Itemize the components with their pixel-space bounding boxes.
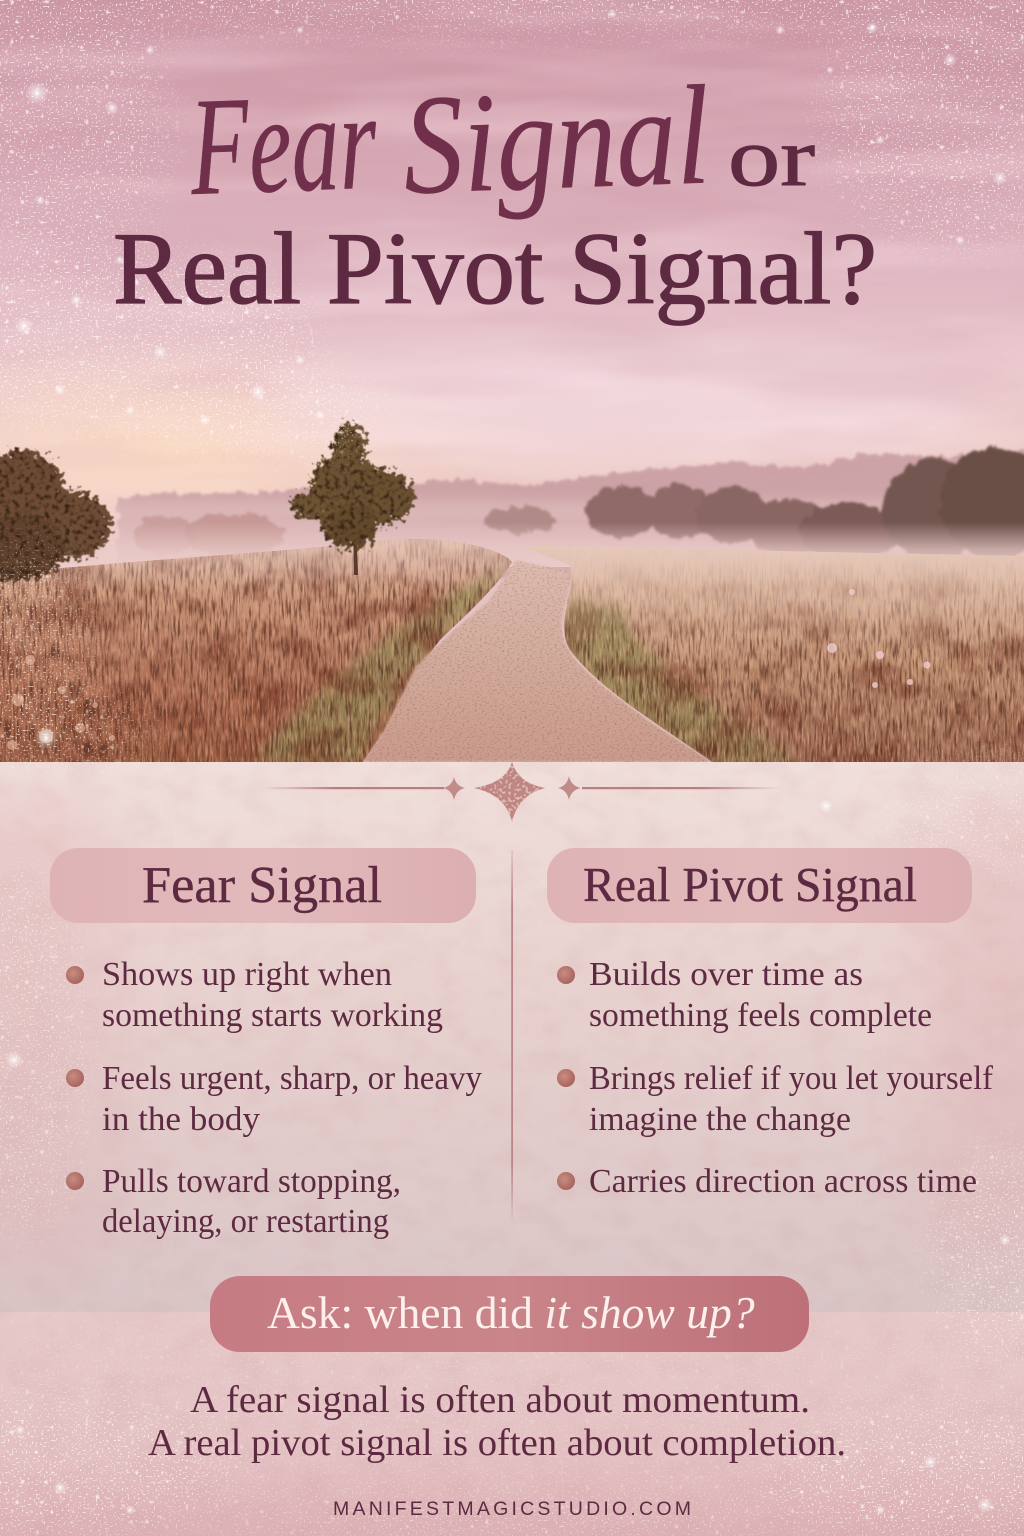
footer website: MANIFESTMAGICSTUDIO.COM: [333, 1498, 691, 1520]
pivot bullet 2: Brings relief if you let yourself: [589, 1060, 994, 1097]
panel: fear signal column: [50, 848, 482, 1240]
title: [113, 55, 877, 326]
fear bullet 3: delaying, or restarting: [102, 1203, 389, 1240]
title line 1: script words: Fear: [187, 64, 379, 225]
pivot bullet 3: Carries direction across time: [589, 1163, 977, 1200]
fear bullet 2: [66, 1060, 482, 1138]
callout: ask question pill: [210, 1276, 809, 1352]
mid tree line right: [586, 447, 1024, 562]
real pivot heading pill: [547, 848, 972, 923]
title line 2: Real Pivot Signal?: [113, 212, 877, 326]
fear bullet 1: [66, 956, 443, 1034]
far tree line: [118, 450, 1024, 580]
closing statement: A fear signal is often about momentum.: [190, 1379, 810, 1421]
column divider: [511, 850, 513, 1220]
lower paper panel: [0, 762, 1024, 1536]
tree: centre sapling: [291, 423, 414, 575]
callout: ask question pill: Ask: when did: [267, 1287, 544, 1338]
ornament divider with sparkles: [262, 760, 782, 824]
closing statement: [148, 1379, 846, 1464]
callout: ask question pill: it show up?: [544, 1287, 755, 1338]
landscape photograph: misty field with dirt path: [0, 423, 1024, 765]
fear signal heading pill: Fear Signal: [142, 857, 382, 914]
dirt path: [360, 555, 720, 765]
title line 1: script words: Signal: [401, 55, 712, 224]
field flowers: [827, 589, 930, 688]
sky background: [0, 0, 1024, 570]
panel: real pivot signal column: [547, 848, 994, 1200]
pivot bullet 1: Builds over time as: [589, 956, 863, 993]
fear signal heading pill: [50, 848, 476, 923]
fear bullet 2: Feels urgent, sharp, or heavy: [102, 1060, 482, 1097]
ground mist: [0, 522, 1024, 567]
tree: left edge: [0, 450, 112, 582]
closing statement: A real pivot signal is often about completion.: [148, 1422, 846, 1464]
pivot bullet 1: [557, 956, 932, 1034]
fear bullet 3: Pulls toward stopping,: [102, 1163, 401, 1200]
pivot bullet 1: something feels complete: [589, 997, 932, 1034]
distant bushes: [135, 507, 557, 557]
real pivot heading pill: Real Pivot Signal: [583, 857, 917, 912]
pivot bullet 2: imagine the change: [589, 1101, 851, 1138]
fear bullet 2: in the body: [102, 1101, 260, 1138]
pivot bullet 2: [557, 1060, 994, 1138]
title line 1: or: or: [728, 111, 815, 204]
fear bullet 1: Shows up right when: [102, 956, 392, 993]
fear bullet 1: something starts working: [102, 997, 443, 1034]
right field: [510, 540, 1024, 762]
mist band behind trees: [100, 500, 1024, 570]
left field: [0, 530, 520, 762]
orange bokeh lower left: [7, 655, 115, 750]
title line 1: script words: [187, 55, 712, 225]
fear bullet 3: [66, 1163, 401, 1240]
